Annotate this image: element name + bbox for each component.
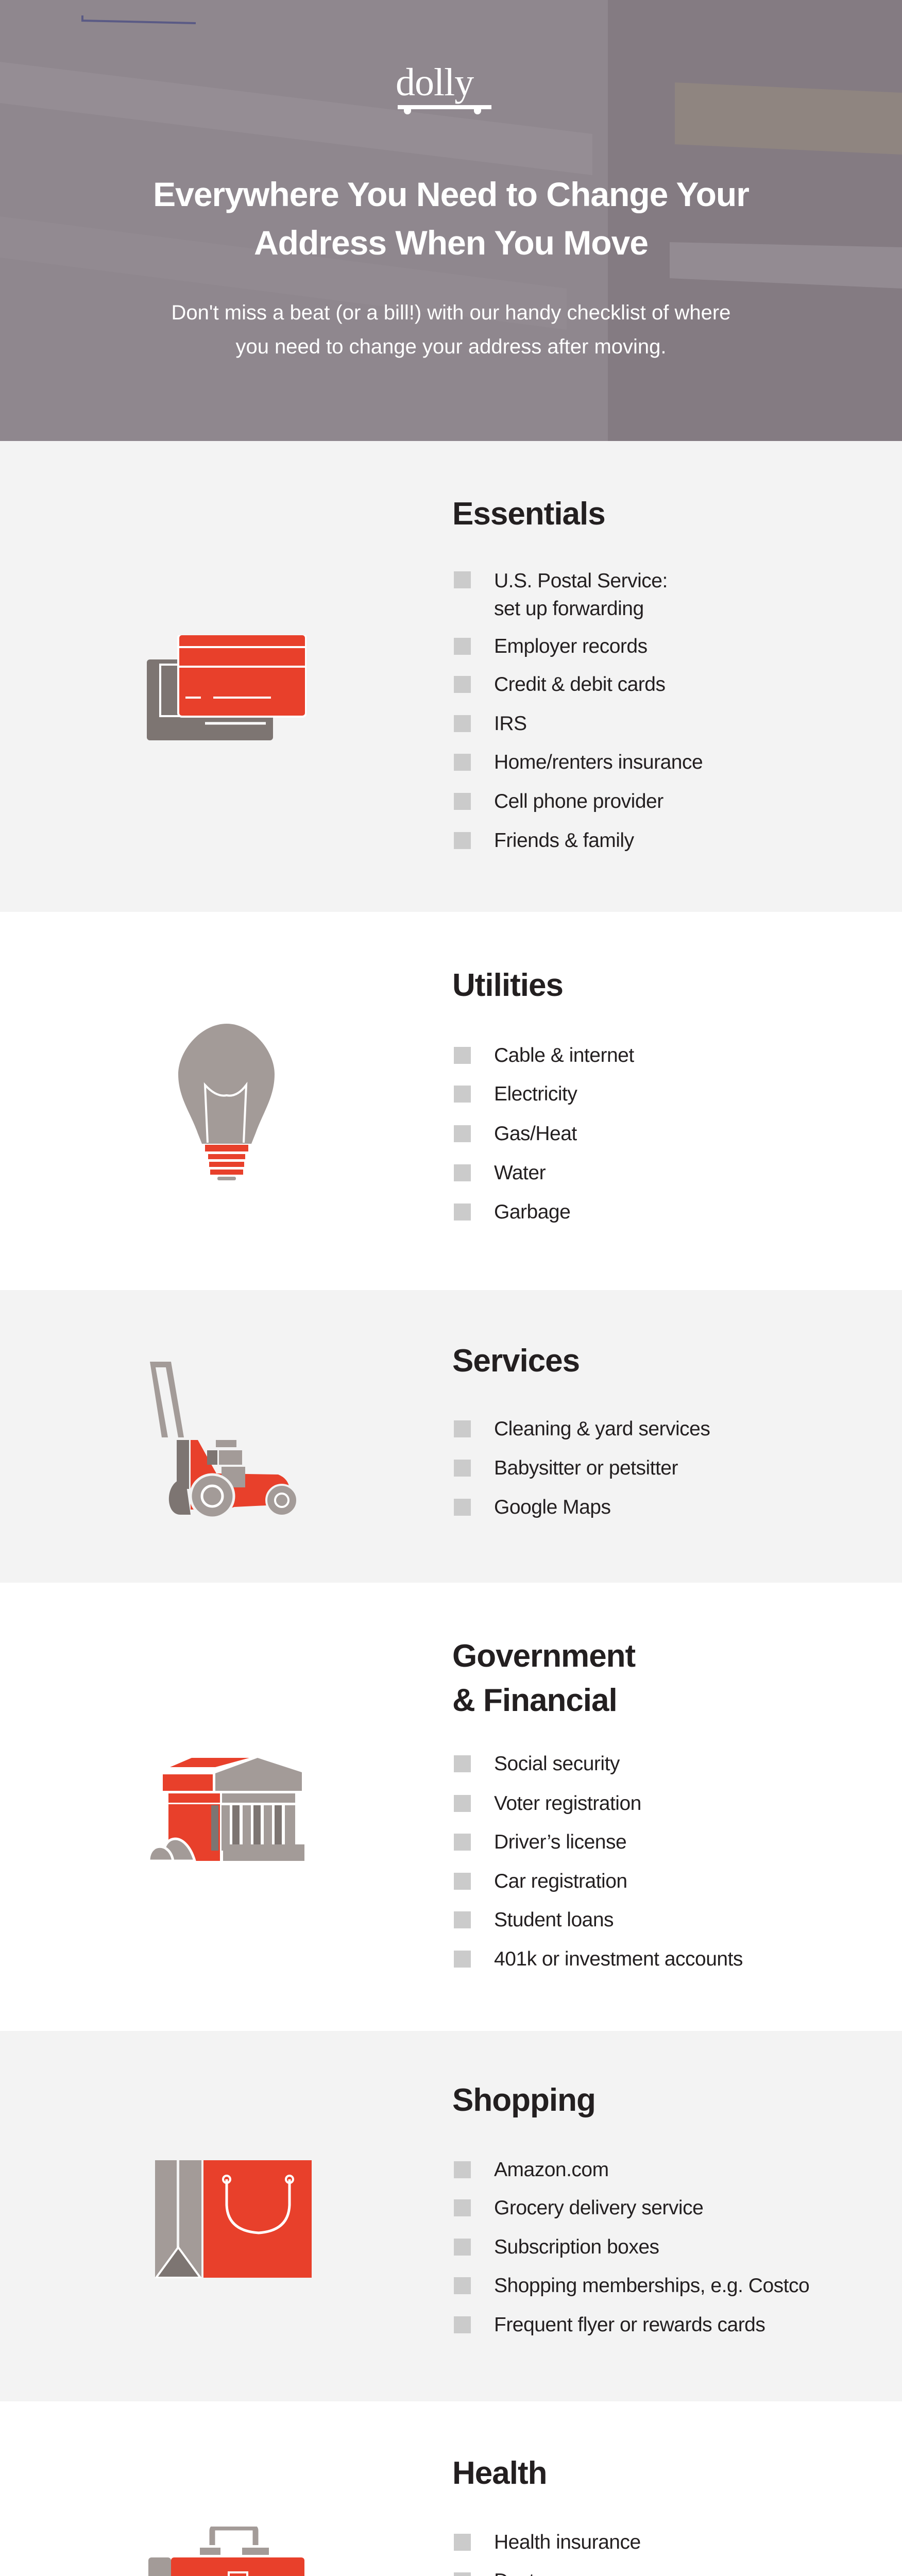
checklist: set up forwarding: [494, 598, 644, 620]
checklist: U.S. Postal Service:: [494, 570, 668, 592]
icon: lawn mower: [150, 1362, 296, 1517]
panel: government & financial: [0, 1583, 902, 2031]
heading: Essentials: [452, 496, 605, 532]
heading: Services: [452, 1343, 580, 1379]
checklist: Subscription boxes: [494, 2236, 659, 2258]
checklist: Amazon.com: [494, 2159, 609, 2181]
panel: utilities: [0, 912, 902, 1290]
checklist: [454, 1418, 710, 1518]
subtitle: you need to change your address after moving.: [235, 335, 667, 358]
header: [0, 0, 902, 441]
checklist: Cell phone provider: [494, 790, 663, 812]
icon: first-aid kit: [148, 2527, 304, 2576]
heading: Government: [452, 1638, 635, 1674]
checklist: Car registration: [494, 1870, 627, 1892]
heading: & Financial: [452, 1683, 617, 1718]
checklist: Water: [494, 1162, 546, 1184]
checklist: Frequent flyer or rewards cards: [494, 2314, 765, 2336]
heading: Shopping: [452, 2082, 595, 2118]
icon: light bulb: [178, 1024, 275, 1180]
checklist: Student loans: [494, 1909, 614, 1931]
checklist: Shopping memberships, e.g. Costco: [494, 2275, 809, 2297]
background paper texture: [0, 15, 902, 289]
subtitle: Don't miss a beat (or a bill!) with our handy checklist of where: [172, 301, 730, 324]
checklist: Cleaning & yard services: [494, 1418, 710, 1440]
checklist: Employer records: [494, 635, 648, 657]
checklist: Home/renters insurance: [494, 751, 703, 773]
checklist: IRS: [494, 713, 527, 735]
title: [153, 175, 749, 262]
panel: services: [0, 1290, 902, 1583]
checklist: Voter registration: [494, 1792, 641, 1815]
heading: [452, 1638, 636, 1718]
checklist: [454, 1044, 634, 1223]
logo: dolly: dolly: [396, 61, 473, 104]
icon: shopping bag: [155, 2160, 312, 2278]
panel: shopping: [0, 2031, 902, 2401]
checklist: [454, 1753, 743, 1970]
checklist: Babysitter or petsitter: [494, 1457, 678, 1479]
checklist: Cable & internet: [494, 1044, 634, 1066]
checklist: Electricity: [494, 1083, 577, 1105]
checklist: Credit & debit cards: [494, 673, 666, 696]
checklist: [454, 2531, 641, 2576]
icon: credit cards: [147, 635, 307, 740]
checklist: [454, 570, 703, 852]
panel: essentials: [0, 441, 902, 912]
checklist: Friends & family: [494, 829, 634, 852]
logo: dolly: [396, 61, 491, 114]
heading: Utilities: [452, 968, 563, 1003]
title: Everywhere You Need to Change Your: [153, 175, 749, 213]
icon: building: [150, 1758, 304, 1861]
checklist: Social security: [494, 1753, 620, 1775]
subtitle: [172, 301, 730, 358]
panel: health: [0, 2401, 902, 2576]
checklist: Google Maps: [494, 1496, 610, 1518]
checklist: [454, 2159, 809, 2336]
checklist: Health insurance: [494, 2531, 641, 2553]
checklist: Driver’s license: [494, 1831, 626, 1853]
checklist: 401k or investment accounts: [494, 1948, 743, 1970]
title: Address When You Move: [254, 224, 648, 262]
checklist: Gas/Heat: [494, 1123, 577, 1145]
heading: Health: [452, 2455, 547, 2491]
checklist: Grocery delivery service: [494, 2197, 703, 2219]
checklist: Garbage: [494, 1201, 570, 1223]
